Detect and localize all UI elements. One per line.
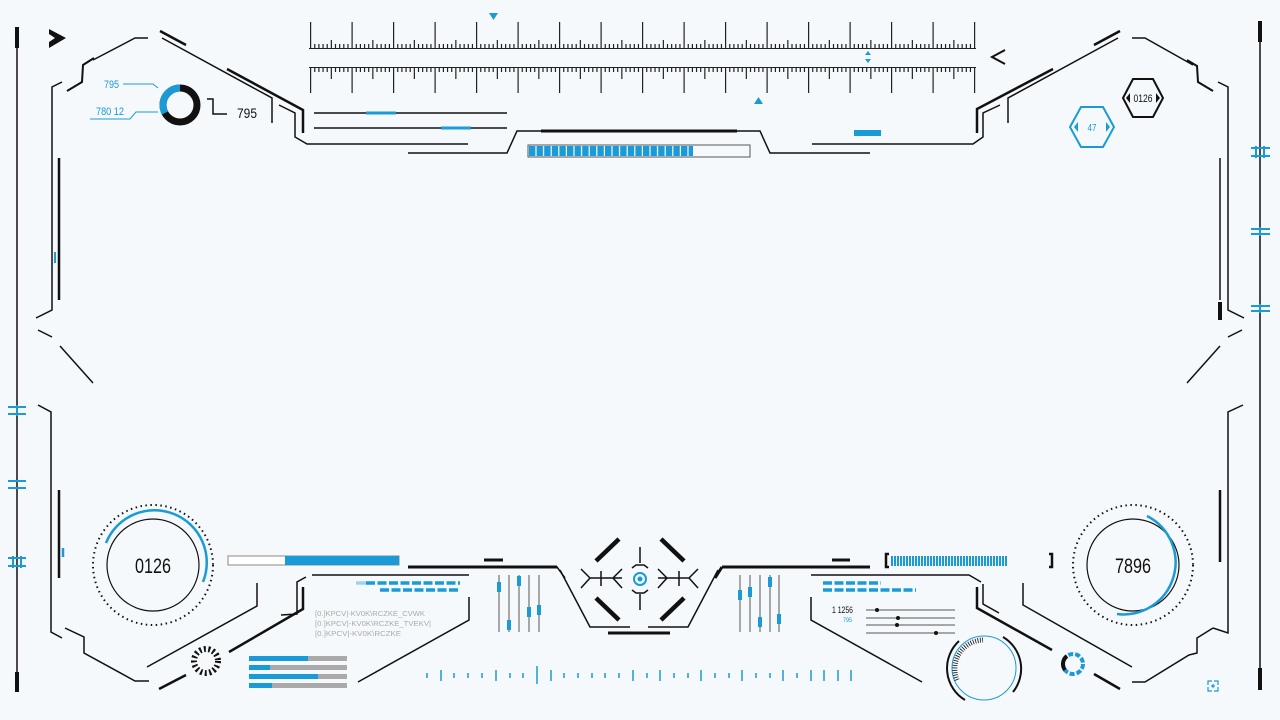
bottom tick scale (427, 666, 851, 684)
donut chart top-left: 780 12 (96, 106, 124, 118)
bottom-left bar (228, 556, 399, 565)
icon: small ring (1063, 654, 1083, 674)
icon: chevron left (992, 50, 1005, 64)
blue dash rows left (366, 583, 460, 590)
hatched bar right (886, 554, 1052, 567)
progress bar top (528, 145, 750, 157)
top data lines (314, 113, 881, 153)
bottom-right frame lines (715, 560, 1132, 689)
sliders right (738, 575, 781, 632)
blue dash rows right (823, 583, 916, 590)
hexagon 0126 (1123, 79, 1163, 117)
right outer rail (1251, 21, 1270, 690)
hexagon 47 (1070, 107, 1114, 147)
slider readout right: 1 1256 (832, 605, 853, 615)
gauge bottom (947, 636, 1021, 700)
crosshair center (560, 539, 718, 633)
hexagon 47: 47 (1088, 123, 1097, 134)
top-left frame (36, 31, 468, 681)
icon: focus (1208, 681, 1218, 691)
code text lines: [0.]KPCV|-KV0K\RCZKE (315, 631, 401, 638)
donut chart top-left: 795 (237, 105, 257, 121)
top-right frame (812, 31, 1244, 682)
code text lines: [0.]KPCV|-KV0K\RCZKE_TVEKV| (315, 621, 431, 628)
dial 7896: 7896 (1115, 555, 1151, 578)
icon: spinner (194, 649, 218, 673)
dial 0126 (93, 505, 213, 625)
bottom-left frame lines (147, 560, 565, 689)
horizontal bar chart (249, 656, 347, 688)
icon: play arrow (49, 29, 66, 48)
code text lines: [0.]KPCV|-KV0K\RCZKE_CVWK (315, 611, 425, 618)
slider readout right (832, 605, 955, 635)
dial 7896 (1073, 505, 1193, 625)
slider readout right: 795 (843, 618, 853, 624)
donut chart top-left (90, 79, 257, 122)
hexagon 0126: 0126 (1134, 93, 1152, 105)
dial 0126: 0126 (135, 555, 171, 578)
sliders left (497, 575, 541, 632)
top ruler (309, 13, 976, 104)
left outer rail (8, 27, 26, 692)
code text lines (315, 611, 431, 638)
donut chart top-left: 795 (104, 79, 119, 91)
